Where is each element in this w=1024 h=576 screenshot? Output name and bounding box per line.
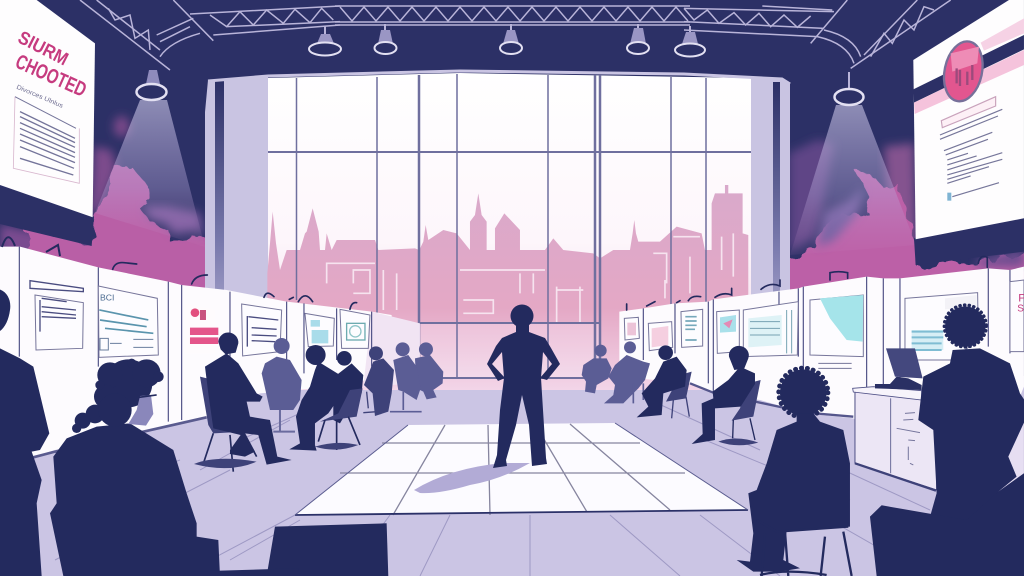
gap behind right figure — [998, 423, 1024, 492]
poster A — [30, 281, 83, 350]
screen text lines — [940, 97, 1002, 201]
mullions — [268, 74, 751, 378]
left column — [205, 76, 268, 382]
screen title: SIURM — [15, 27, 72, 69]
lamp 4 — [627, 24, 649, 54]
poster 8: S — [1017, 304, 1024, 315]
screen body lines — [13, 97, 79, 183]
man at left edge — [0, 288, 49, 576]
lamp arcs upper left — [2, 237, 60, 256]
lamp 5 — [675, 26, 705, 56]
presenter silhouette — [487, 304, 560, 468]
right standing man — [913, 305, 1024, 576]
magenta cloud right — [784, 140, 1024, 300]
screen title: CHOOTED — [12, 50, 90, 102]
lamp 1 — [309, 26, 341, 56]
floor — [0, 376, 1024, 576]
foreground seat edge — [183, 568, 300, 576]
ceiling spotlights — [136, 24, 864, 105]
right exhibition panels — [619, 256, 1024, 473]
window glass — [268, 73, 751, 380]
window top frame — [208, 71, 790, 84]
poster 2 — [648, 322, 673, 351]
poster B — [98, 286, 158, 357]
screen subtitle: Divorces Ulnlus — [15, 84, 64, 110]
lamp arcs left wall — [113, 263, 357, 309]
poster F — [340, 309, 370, 348]
left exhibition panels — [0, 237, 420, 460]
foreground chair back — [267, 523, 388, 576]
far attendee 6 — [415, 342, 443, 399]
desk with monitor — [853, 348, 937, 491]
left screen — [0, 0, 95, 246]
attendee 2 faded — [262, 338, 302, 432]
chair 3 — [315, 388, 363, 450]
chair seated man — [194, 377, 257, 472]
spotlight beam right — [790, 105, 916, 255]
seated man — [205, 332, 292, 465]
floor planks — [55, 400, 930, 576]
window — [205, 71, 790, 390]
audience left — [0, 288, 443, 576]
screen badge — [939, 38, 988, 105]
foreground figure right — [870, 473, 1024, 576]
lower window band — [419, 323, 600, 378]
monitor — [875, 348, 923, 390]
city skyline — [267, 185, 748, 390]
poster 4 — [717, 310, 739, 353]
screen title — [12, 27, 90, 102]
poster 5 — [743, 302, 798, 357]
afro woman chair — [757, 520, 852, 576]
poster C — [185, 303, 218, 353]
far attendee 5 — [390, 342, 422, 412]
right attendee 3 — [637, 345, 692, 418]
floor mat — [295, 423, 748, 515]
ceiling trusses left — [80, 0, 340, 70]
lamp arcs right wall — [627, 256, 987, 310]
right far attendee 1 — [582, 345, 612, 393]
attendee 3 — [333, 351, 363, 423]
magenta cloud left — [0, 116, 213, 300]
poster 1 — [624, 317, 639, 340]
right column — [751, 78, 790, 382]
ceiling trusses right — [684, 0, 951, 68]
spotlight beam left — [95, 100, 205, 247]
desk writing — [897, 413, 920, 465]
side lamp right — [834, 72, 864, 105]
poster B: BCI — [100, 293, 114, 303]
poster 6 — [810, 295, 863, 368]
afro woman foreground — [737, 368, 852, 576]
poster E — [305, 313, 334, 347]
side lamp left — [136, 70, 166, 100]
far attendee 4 — [363, 346, 394, 416]
ceiling truss centre — [335, 6, 690, 25]
woman face — [128, 395, 153, 426]
attendee 4 dark — [289, 345, 343, 451]
audience right — [582, 305, 1024, 576]
poster 7 — [905, 293, 978, 360]
right attendee 4 — [692, 346, 761, 445]
presenter shadow — [414, 463, 530, 493]
poster 3 — [681, 309, 703, 347]
curly hair — [72, 359, 164, 433]
lamp 2 — [374, 24, 396, 54]
lamp 3 — [500, 24, 522, 54]
right screen — [913, 0, 1024, 265]
poster D — [242, 304, 282, 356]
seated woman foreground — [50, 359, 220, 576]
right far attendee 2 — [604, 341, 650, 403]
poster 8 — [1010, 280, 1024, 352]
